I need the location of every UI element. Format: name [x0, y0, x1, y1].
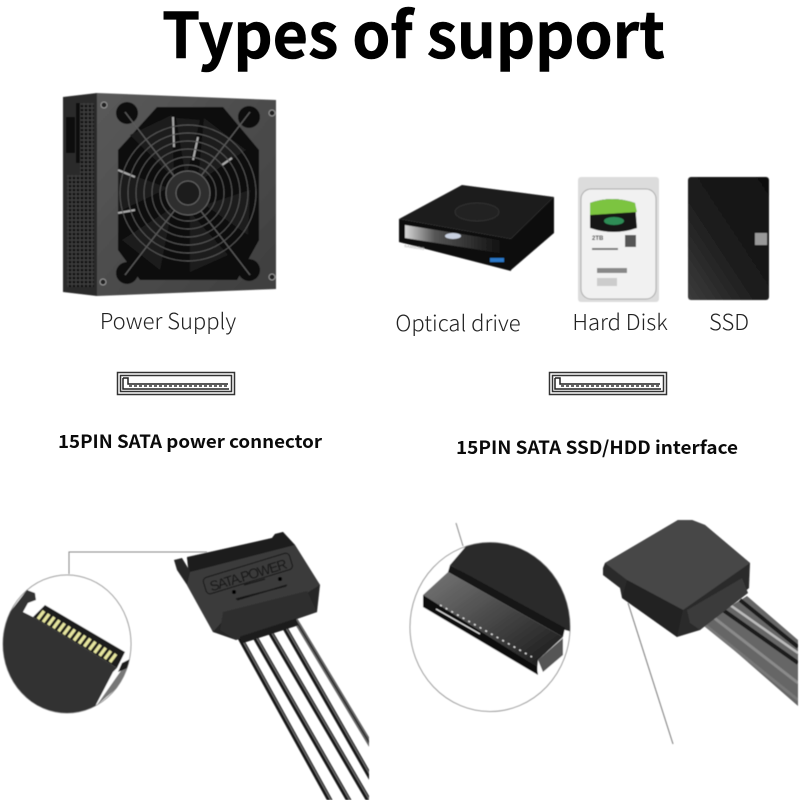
cable wires [703, 596, 798, 706]
icon: optical drive [399, 185, 554, 271]
qr code [625, 235, 636, 247]
cable sockets [241, 622, 297, 640]
heading: drive interface: 15PIN SATA SSD/HDD interface [456, 434, 738, 460]
icon: SATA drive interface diagram [550, 372, 666, 394]
icon: SATA power connector diagram [118, 372, 234, 394]
label: power supply: Power Supply [100, 304, 236, 336]
icon: power supply [63, 93, 276, 296]
logo text: SAMSUNG [404, 243, 425, 251]
fan [116, 102, 260, 284]
icon: hard disk [578, 177, 659, 302]
embossed label: SATA.POWER [208, 556, 289, 594]
label: SSD: SSD [709, 305, 749, 337]
label: optical drive: Optical drive [395, 306, 521, 338]
SATA power cable connector [174, 532, 373, 800]
cable wires [233, 611, 373, 800]
drive capacity text: 2TB [592, 236, 604, 242]
heading: power connector: 15PIN SATA power connector [58, 428, 322, 454]
icon: SSD [688, 177, 769, 300]
callout: SATA drive socket [409, 522, 571, 713]
gold contacts [38, 611, 116, 662]
callout: SATA power contacts [0, 552, 207, 720]
label: hard disk: Hard Disk [572, 305, 668, 337]
SATA drive cable connector [603, 520, 798, 744]
